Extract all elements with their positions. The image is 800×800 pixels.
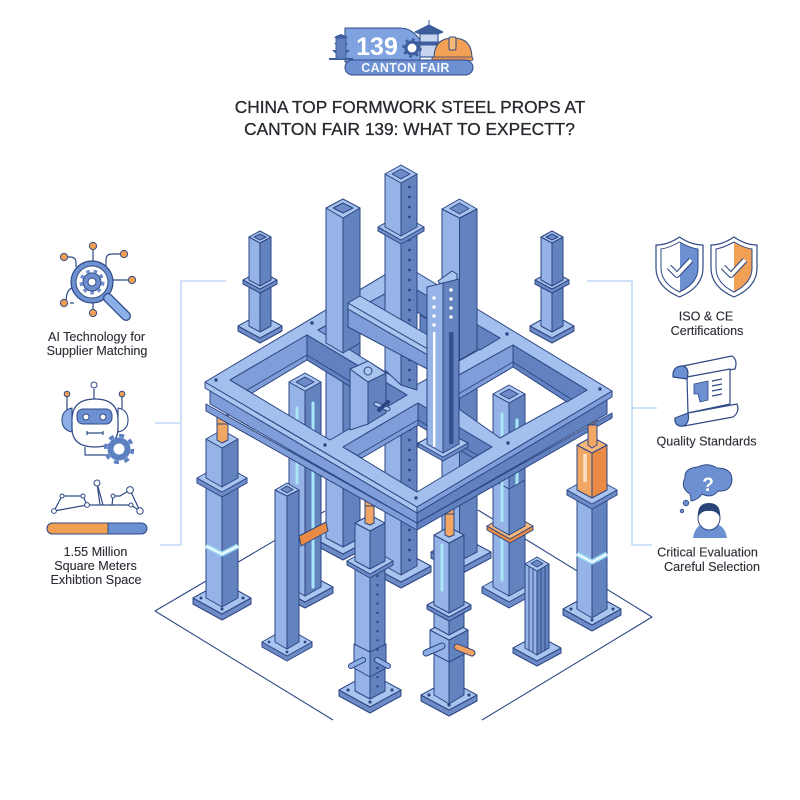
exhibition space panel: Exhibtion Space xyxy=(50,573,142,587)
frame left side xyxy=(205,382,417,530)
tall centre column with holes and collar xyxy=(378,165,424,390)
small back-left prop xyxy=(238,231,282,343)
slim front-left prop xyxy=(262,483,312,661)
certifications panel: Certifications xyxy=(671,324,743,338)
wall flange lines xyxy=(247,355,571,455)
ground outline xyxy=(155,510,652,720)
robot panel xyxy=(62,382,132,462)
icon: thought bubble and person: ? xyxy=(702,475,714,496)
exhibition space panel xyxy=(47,480,147,587)
icon: document scroll xyxy=(673,356,738,426)
icon: orange shield xyxy=(711,237,757,297)
lower back-right column xyxy=(431,209,491,574)
icon: robot with gear xyxy=(62,382,132,462)
icon: blue shield xyxy=(656,237,703,297)
quality standards panel xyxy=(656,356,757,448)
front-left corner prop xyxy=(193,424,251,620)
main frame xyxy=(205,264,612,530)
right corner prop with orange sleeve xyxy=(563,425,621,631)
front-centre perforated prop xyxy=(339,506,401,713)
label: quality standards: Quality Standards xyxy=(656,434,757,448)
steel prop assembly xyxy=(193,165,621,716)
logo: Canton Fair 139: 139 xyxy=(356,33,398,61)
logo: Canton Fair 139 xyxy=(329,20,473,75)
exhibition space panel: Square Meters xyxy=(54,559,137,573)
progress bar xyxy=(47,523,147,534)
logo: Canton Fair 139: CANTON FAIR xyxy=(361,61,450,75)
label: AI technology: AI Technology for xyxy=(48,330,145,344)
label: exhibition space: 1.55 Million xyxy=(64,545,127,559)
tall back-left column xyxy=(326,199,360,353)
frame right side xyxy=(417,391,612,530)
frame top surface xyxy=(205,264,612,507)
raised cross beam xyxy=(348,296,445,372)
certifications panel xyxy=(656,237,757,338)
central perforated prop xyxy=(418,271,468,461)
AI technology panel: Supplier Matching xyxy=(47,344,147,358)
left connector bracket xyxy=(155,281,226,545)
lower back-centre column xyxy=(371,174,431,588)
frame inner walls xyxy=(230,283,587,458)
critical evaluation panel xyxy=(657,465,760,574)
icon: magnifier with gear and nodes xyxy=(60,242,136,317)
clamp block on frame xyxy=(350,361,388,430)
small back-right prop xyxy=(530,231,574,343)
label: critical evaluation: Critical Evaluation xyxy=(657,546,758,560)
title: CHINA TOP FORMWORK STEEL PROPS AT xyxy=(235,97,586,117)
lower back-left column xyxy=(313,208,373,560)
title: CANTON FAIR 139: WHAT TO EXPECTT? xyxy=(244,119,575,139)
critical evaluation panel: Careful Selection xyxy=(664,560,760,574)
inner right column with orange collar xyxy=(482,385,536,608)
tall back-right column xyxy=(442,199,477,360)
icon: network path xyxy=(52,480,143,514)
AI technology panel xyxy=(47,242,147,358)
frame bolts xyxy=(214,321,602,500)
front-right prop with pins xyxy=(421,514,477,716)
ribbed prop xyxy=(513,557,561,666)
orange posts under frame xyxy=(217,415,597,534)
inner left column with glow strips xyxy=(277,373,333,608)
title xyxy=(235,97,586,139)
right connector bracket xyxy=(587,281,657,545)
label: certifications: ISO & CE xyxy=(679,310,733,324)
